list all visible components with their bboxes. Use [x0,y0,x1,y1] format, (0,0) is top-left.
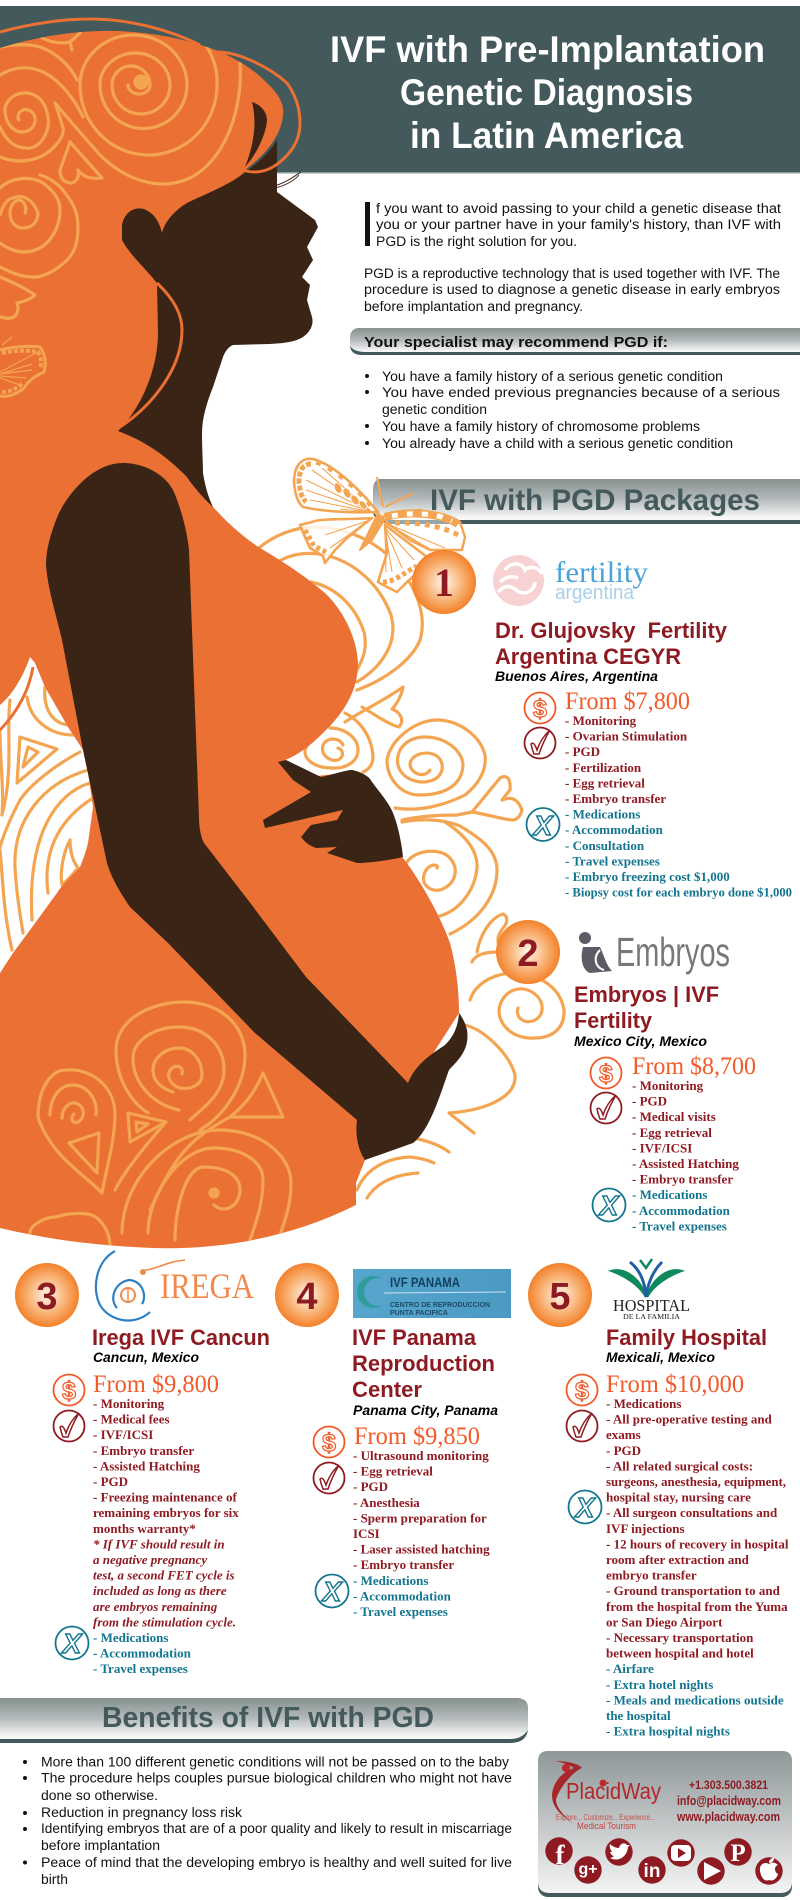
icon: price [524,692,556,724]
package 3: Irega [15,1251,270,1676]
package 3: Irega: Cancun, Mexico [93,1349,199,1365]
included and excluded items: - Egg retrieval [353,1464,433,1479]
logo: PlacidWay: Medical Tourism [577,1821,636,1831]
included and excluded items: - Monitoring [632,1078,704,1093]
contact card: PlacidWay [538,1751,792,1897]
included and excluded items: - Medical visits [632,1109,716,1124]
logo: Hospital de la Familia [612,1259,690,1321]
icon: price: $ [62,1377,76,1405]
badge 3: 3 [36,1276,58,1318]
package 1: Fertility Argentina: Buenos Aires, Argentina [495,668,658,684]
icon: price [54,1374,84,1406]
badge 2 [496,920,560,984]
included and excluded items [565,713,792,900]
included and excluded items: between hospital and hotel [606,1646,754,1661]
package 5: Family Hospital: From $10,000 [606,1371,744,1398]
included and excluded items: - All related surgical costs: [606,1458,753,1473]
icon: excluded: X [532,810,555,841]
included and excluded items: - Ovarian Stimulation [565,729,688,744]
included and excluded items: - Embryo transfer [632,1172,733,1187]
icon: excluded [592,1188,626,1222]
social media icons: g+ [578,1861,598,1878]
included and excluded items: - Travel expenses [353,1604,448,1619]
included and excluded items: embryo transfer [606,1568,697,1583]
included and excluded items: - Travel expenses [565,853,660,868]
list: reasons for PGD: genetic condition [382,402,487,417]
included and excluded items: or San Diego Airport [606,1614,723,1629]
package 1: Fertility Argentina: Dr. Glujovsky Fertility [495,618,728,643]
included and excluded items [93,1396,239,1676]
icon: price: $ [322,1429,336,1457]
contact details [676,1778,781,1824]
icon: excluded: X [598,1190,621,1221]
list: benefits: Peace of mind that the developing embryo is healthy and well suited for live [41,1855,512,1870]
social media icons: f [556,1840,566,1870]
badge 5: 5 [549,1276,571,1318]
icon: excluded: X [321,1576,344,1607]
included and excluded items: - Accommodation [565,822,664,837]
badge 4: 4 [296,1276,318,1318]
belly swirl patterns [30,1002,291,1247]
banner: Benefits of IVF with PGD: Benefits of IVF with PGD [102,1702,434,1734]
included and excluded items: hospital stay, nursing care [606,1490,751,1505]
included and excluded items: - PGD [565,744,600,759]
social media icons: P [730,1840,746,1867]
dark arm and hand [46,463,467,1160]
header band [0,6,800,174]
included and excluded items: - PGD [632,1094,667,1109]
included and excluded items: test, a second FET cycle is [93,1568,235,1583]
decorative swirls right of figure [260,527,564,1198]
badge 3 [15,1263,79,1327]
logo: PlacidWay: Explore... Customize... Experience... [556,1813,655,1822]
included and excluded items: - Consultation [565,838,645,853]
logo: Hospital de la Familia: DE LA FAMILIA [623,1312,681,1321]
included and excluded items: - Extra hotel nights [606,1677,713,1692]
icon: excluded [568,1490,602,1524]
package 3: Irega: Irega IVF Cancun [92,1325,270,1350]
icon: excluded [316,1574,348,1608]
package 5: Family Hospital: Mexicali, Mexico [606,1349,715,1365]
title [330,29,765,156]
included and excluded items: included as long as there [93,1583,227,1598]
logo: Hospital de la Familia: HOSPITAL [613,1296,690,1315]
contact details: info@placidway.com [677,1794,781,1808]
included and excluded items: - Accommodation [93,1646,192,1661]
package 1: Fertility Argentina [412,550,792,900]
logo: Embryos [579,929,730,975]
included and excluded items: from the hospital from the Yuma [606,1599,788,1614]
included and excluded items [606,1396,789,1739]
package 4: IVF Panama: From $9,850 [354,1423,480,1450]
included and excluded items: months warranty* [93,1521,196,1536]
included and excluded items: room after extraction and [606,1552,750,1567]
package 1: Fertility Argentina: Argentina CEGYR [495,644,681,669]
logo: fertility argentina: fertility [555,556,648,589]
icon: included [566,1410,598,1442]
logo: IVF Panama: PUNTA PACIFICA [390,1308,449,1317]
package 4: IVF Panama: Panama City, Panama [353,1402,498,1418]
included and excluded items: the hospital [606,1708,671,1723]
social media icons [545,1837,783,1885]
included and excluded items: - Travel expenses [93,1661,188,1676]
included and excluded items: - Embryo transfer [93,1443,194,1458]
icon: price: $ [599,1060,613,1088]
logo: fertility argentina [493,555,648,606]
icon: price [590,1058,622,1088]
list: benefits: done so otherwise. [41,1788,158,1803]
list: reasons for PGD: You have a family history of a serious genetic condition [382,369,723,384]
included and excluded items: - IVF/ICSI [632,1140,692,1155]
included and excluded items: exams [606,1427,641,1442]
intro paragraph: procedure is used to diagnose a genetic disease in early embryos [364,282,780,297]
logo: Irega [96,1251,254,1320]
included and excluded items: - Medications [93,1630,168,1645]
badge 1: 1 [434,560,454,605]
list: reasons for PGD: You have a family history of chromosome problems [382,419,700,434]
banner: Benefits of IVF with PGD [0,1698,528,1743]
list: benefits: before implantation [41,1838,160,1853]
included and excluded items: - All surgeon consultations and [606,1505,778,1520]
package 1: Fertility Argentina: From $7,800 [565,688,690,715]
logo: Irega: IREGA [160,1266,254,1306]
package 2: Embryos: Fertility [574,1008,653,1033]
included and excluded items: - IVF/ICSI [93,1427,153,1442]
list: benefits [23,1754,512,1887]
included and excluded items: ICSI [353,1526,380,1541]
included and excluded items [632,1078,739,1233]
list: benefits: More than 100 different genetic conditions will not be passed on to the baby [41,1754,509,1770]
included and excluded items: - Accommodation [353,1588,452,1603]
icon: price [566,1374,598,1406]
hair arc over forehead [217,52,300,172]
included and excluded items: - Airfare [606,1661,654,1676]
package 2: Embryos: Mexico City, Mexico [574,1033,707,1049]
banner: your specialist may recommend [350,328,800,355]
included and excluded items: - Medications [353,1573,428,1588]
included and excluded items: - Assisted Hatching [632,1156,739,1171]
title: Genetic Diagnosis [400,72,693,113]
package 5: Family Hospital [528,1259,789,1739]
badge 2: 2 [517,933,539,975]
included and excluded items: - Biopsy cost for each embryo done $1,000 [565,885,792,900]
icon: excluded: X [574,1492,597,1523]
included and excluded items: - Medications [565,807,640,822]
package 2: Embryos: From $8,700 [632,1053,756,1080]
list: benefits: Identifying embryos that are of a poor quality and likely to result in miscarriage [41,1821,512,1836]
included and excluded items: - Extra hospital nights [606,1724,730,1739]
package 5: Family Hospital: Family Hospital [606,1325,767,1350]
badge 5 [528,1263,592,1327]
logo: fertility argentina: argentina [555,582,635,604]
title: in Latin America [410,115,683,156]
small butterfly on hair [0,337,45,396]
icon: butterfly [294,459,465,592]
included and excluded items: - All pre-operative testing and [606,1412,773,1427]
intro paragraph: PGD is a reproductive technology that is used together with IVF. The [364,266,780,281]
included and excluded items: - Embryo transfer [565,791,666,806]
included and excluded items: - PGD [606,1443,641,1458]
included and excluded items: surgeons, anesthesia, equipment, [606,1474,786,1489]
white patterned cut-out on back [0,657,93,973]
included and excluded items: - Sperm preparation for [353,1510,487,1525]
icon: excluded: X [61,1628,84,1659]
badge 4 [275,1263,339,1327]
included and excluded items: - Travel expenses [632,1218,727,1233]
package 4: IVF Panama [275,1263,511,1619]
list: benefits: birth [41,1872,68,1887]
included and excluded items: - Ground transportation to and [606,1583,781,1598]
package 4: IVF Panama: Center [352,1377,422,1402]
contact details: www.placidway.com [676,1810,780,1824]
logo: PlacidWay [552,1761,661,1831]
list: benefits: Reduction in pregnancy loss risk [41,1805,242,1820]
banner: IVF with PGD Packages [373,479,800,524]
list: reasons for PGD [365,369,780,451]
included and excluded items: - Egg retrieval [632,1125,712,1140]
included and excluded items: - Fertilization [565,760,642,775]
included and excluded items: - PGD [353,1479,388,1494]
icon: price: $ [575,1377,589,1405]
included and excluded items: IVF injections [606,1521,685,1536]
included and excluded items: - Accommodation [632,1203,731,1218]
included and excluded items: - PGD [93,1474,128,1489]
list: reasons for PGD: You have ended previous pregnancies because of a serious [382,385,780,400]
hair swirl patterns [0,33,240,318]
icon: included [590,1092,622,1124]
included and excluded items: - Embryo freezing cost $1,000 [565,869,730,884]
logo: IVF Panama [353,1269,511,1318]
logo: Embryos: Embryos [616,929,730,975]
included and excluded items: - 12 hours of recovery in hospital [606,1536,789,1551]
included and excluded items: - Ultrasound monitoring [353,1448,489,1463]
package 2: Embryos [496,920,756,1233]
badge 1 [412,550,476,614]
included and excluded items: - Monitoring [93,1396,165,1411]
included and excluded items: - Assisted Hatching [93,1458,200,1473]
included and excluded items: are embryos remaining [93,1599,218,1614]
included and excluded items: - Freezing maintenance of [93,1490,237,1505]
intro paragraph: f you want to avoid passing to your child a genetic disease that [376,201,781,216]
package 2: Embryos: Embryos | IVF [574,982,719,1007]
icon: included [314,1462,344,1494]
banner: your specialist may recommend: Your specialist may recommend PGD if: [364,334,668,351]
logo: IVF Panama: IVF PANAMA [390,1274,460,1290]
icon: included [524,728,556,758]
upper hand [263,760,403,863]
included and excluded items: - Meals and medications outside [606,1692,784,1707]
package 4: IVF Panama: IVF Panama [352,1325,477,1350]
icon: price: $ [533,695,547,723]
included and excluded items: * If IVF should result in [93,1536,225,1551]
intro paragraph: PGD is the right solution for you. [376,234,577,249]
pregnant woman silhouette: orange body and hair [0,19,459,1248]
included and excluded items: a negative pregnancy [93,1552,207,1567]
included and excluded items: remaining embryos for six [93,1505,239,1520]
logo: PlacidWay: PlacidWay [566,1778,661,1804]
logo: IVF Panama: CENTRO DE REPRODUCCION [390,1300,490,1309]
included and excluded items: - Medications [632,1187,707,1202]
icon: price [314,1426,344,1458]
included and excluded items: - Necessary transportation [606,1630,754,1645]
package 3: Irega: From $9,800 [93,1371,219,1398]
social media icons: in [644,1861,660,1882]
intro paragraph: you or your partner have in your family's history, than IVF with [376,217,781,232]
included and excluded items: - Monitoring [565,713,637,728]
icon: excluded [56,1626,88,1660]
package 4: IVF Panama: Reproduction [352,1351,495,1376]
included and excluded items: from the stimulation cycle. [93,1614,236,1629]
included and excluded items [353,1448,490,1619]
included and excluded items: - Egg retrieval [565,775,645,790]
icon: included [54,1410,84,1442]
included and excluded items: - Medical fees [93,1412,170,1427]
intro paragraph [364,201,781,314]
banner: IVF with PGD Packages: IVF with PGD Packages [430,484,760,517]
dark face and neck profile [117,102,318,507]
included and excluded items: - Medications [606,1396,681,1411]
included and excluded items: - Embryo transfer [353,1557,454,1572]
list: reasons for PGD: You already have a child with a serious genetic condition [382,436,733,451]
intro paragraph: before implantation and pregnancy. [364,299,583,314]
title: IVF with Pre-Implantation [330,29,765,70]
icon: excluded [526,808,560,841]
included and excluded items: - Anesthesia [353,1495,420,1510]
list: benefits: The procedure helps couples pursue biological children who might not have [41,1770,512,1786]
included and excluded items: - Laser assisted hatching [353,1542,490,1557]
contact details: +1.303.500.3821 [689,1778,768,1792]
